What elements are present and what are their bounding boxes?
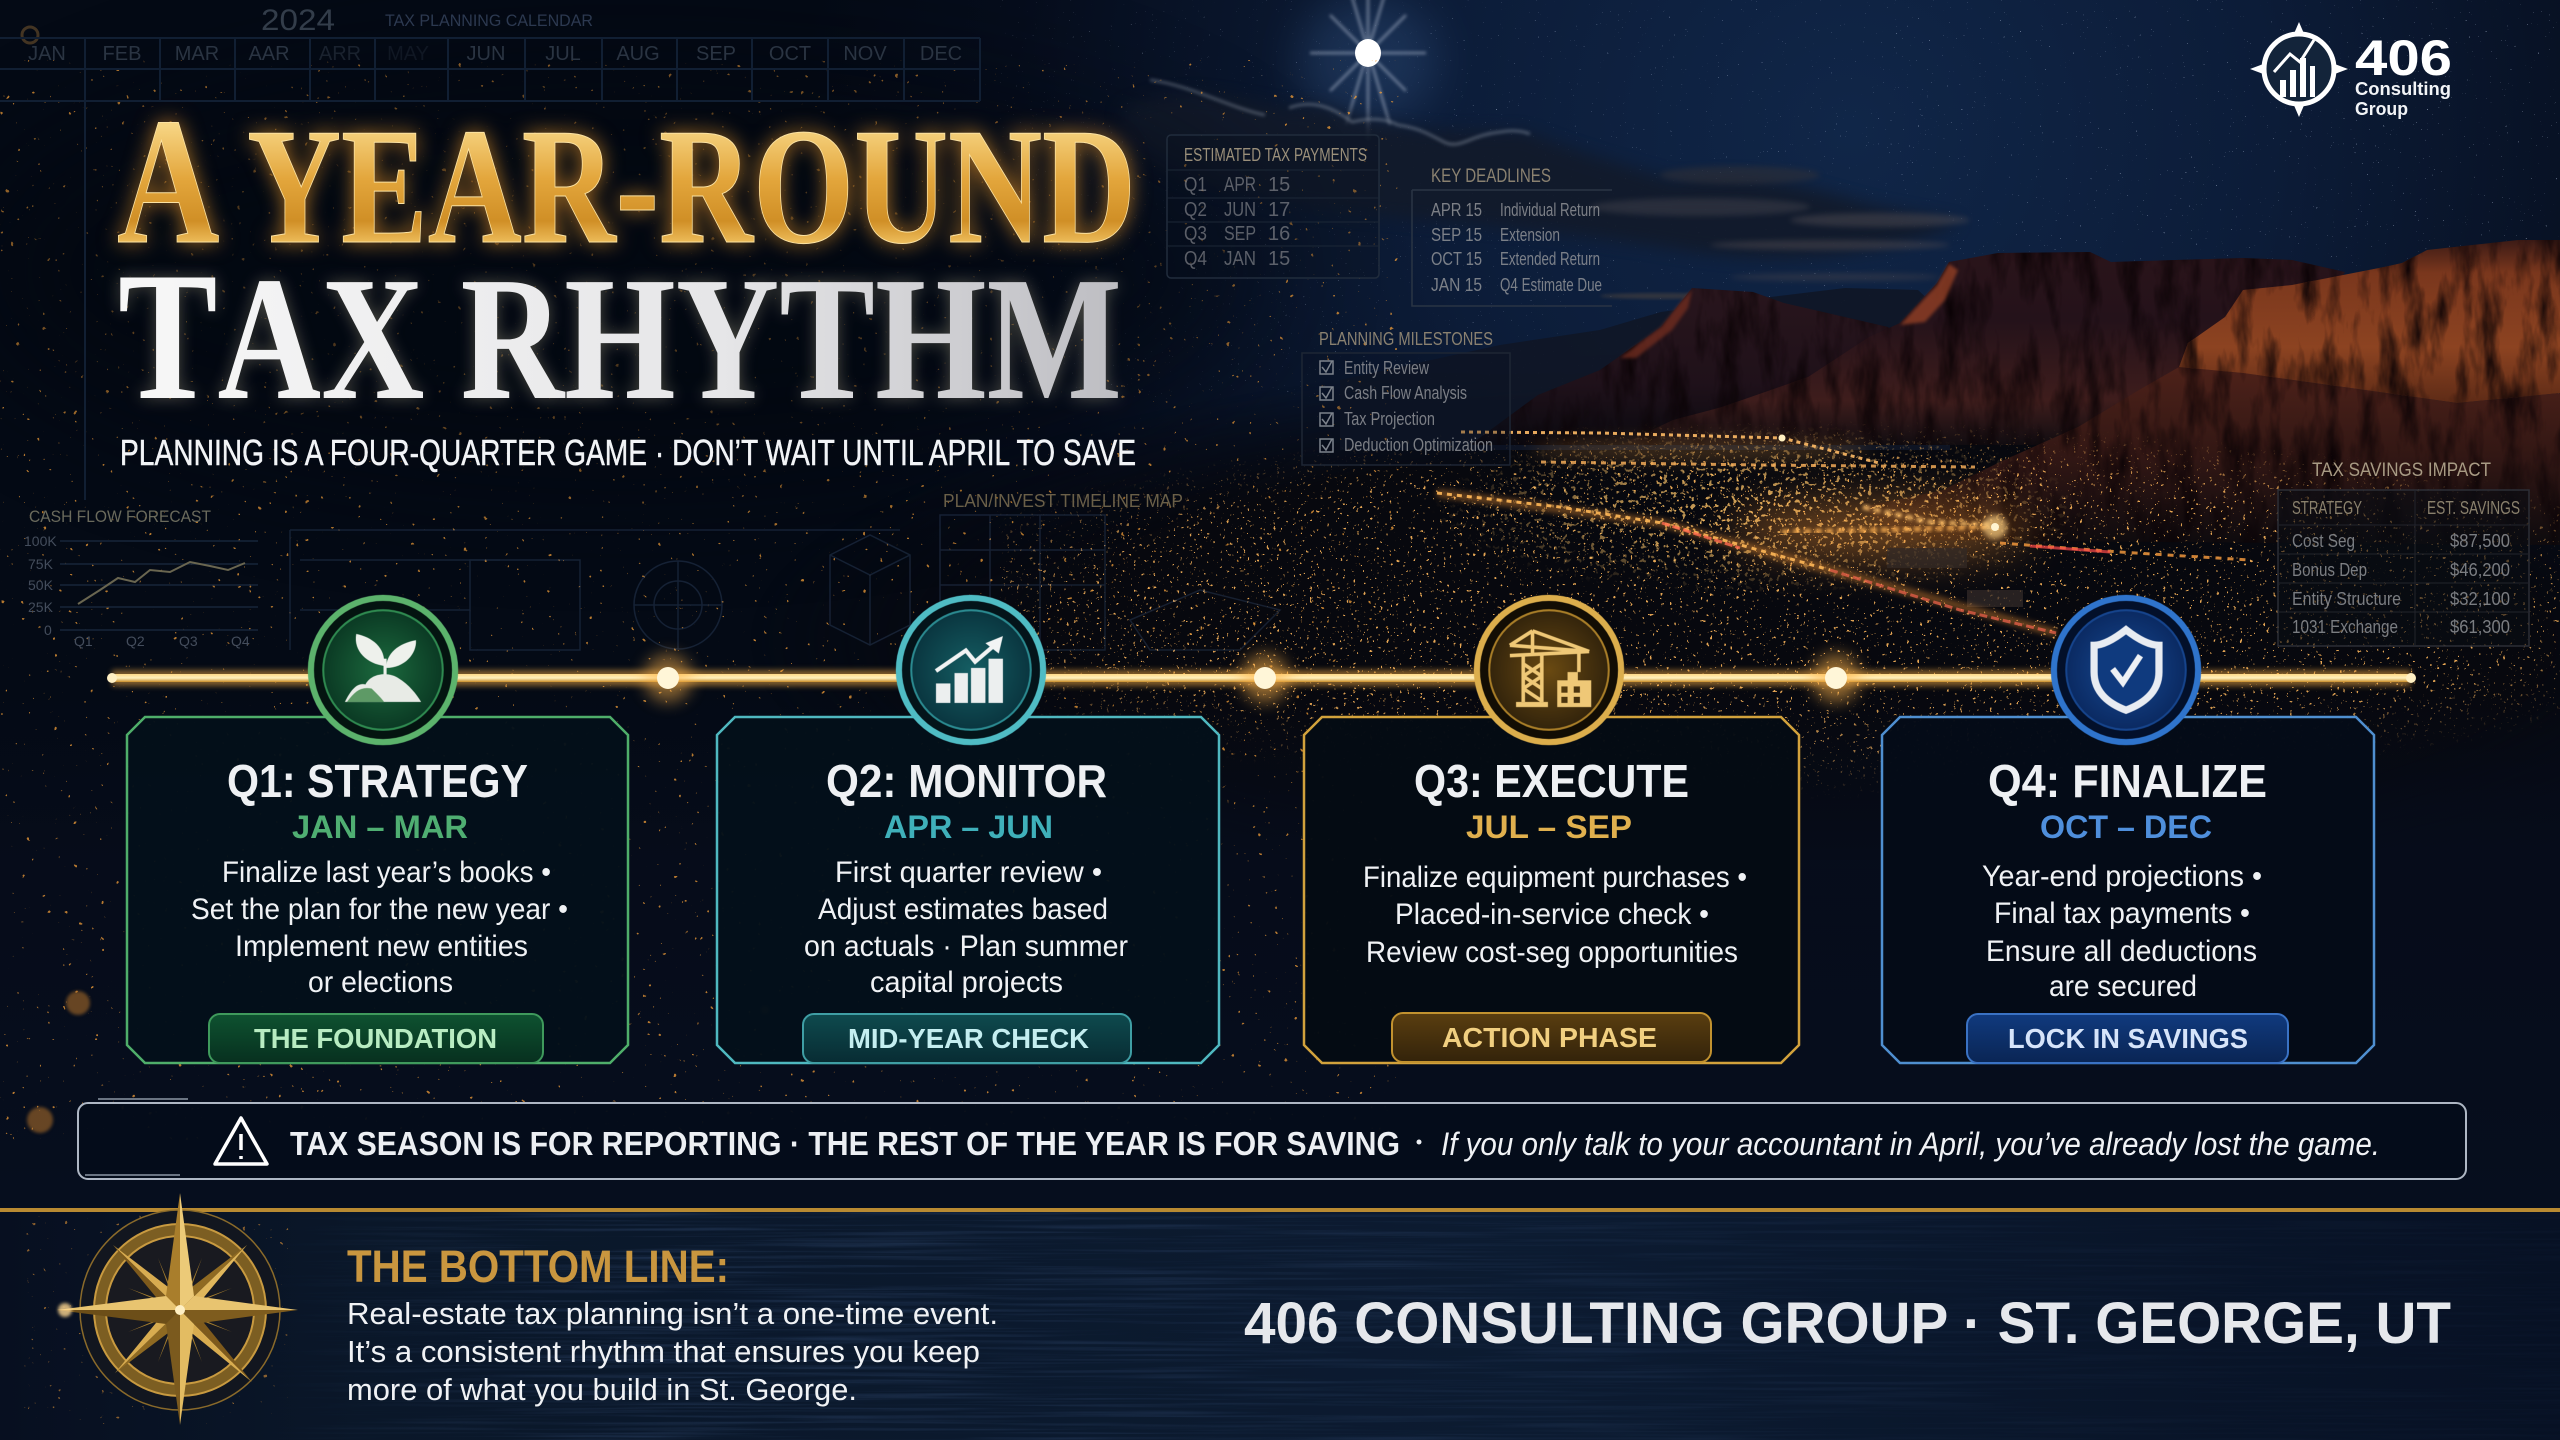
bottom line body: It’s a consistent rhythm that ensures you keep <box>347 1334 980 1369</box>
date range: OCT – DEC <box>2040 809 2212 845</box>
bottom line heading: THE BOTTOM LINE: <box>347 1241 729 1292</box>
company sign-off: 406 CONSULTING GROUP · ST. GEORGE, UT <box>1244 1291 2451 1356</box>
tag pill: MID-YEAR CHECK <box>848 1023 1089 1054</box>
ghost panel: tax savings impact: $32,100 <box>2450 589 2510 609</box>
ghost panel: tax planning calendar: AUG <box>616 43 660 65</box>
body text: are secured <box>2049 970 2197 1003</box>
ghost panel: tax planning calendar: OCT <box>769 43 811 65</box>
title line one: A YEAR-ROUND <box>117 82 1136 282</box>
icon: Q4 shield medallion <box>2054 598 2198 742</box>
bottom line body <box>347 1296 998 1407</box>
date range: JUL – SEP <box>1466 809 1632 845</box>
tag pill: THE FOUNDATION <box>254 1023 497 1054</box>
ghost panel: planning milestones: Entity Review <box>1344 358 1430 378</box>
bottom line body: Real-estate tax planning isn’t a one-time event. <box>347 1296 998 1331</box>
middle mesa lit edge <box>1900 264 1958 325</box>
logo wordmark: 406 <box>2355 30 2452 86</box>
ghost panel: estimated tax payments: JAN <box>1224 248 1256 270</box>
ghost panel: planning milestones: Tax Projection <box>1344 409 1435 429</box>
logo: Group <box>2355 99 2408 119</box>
ghost panel: key deadlines: Q4 Estimate Due <box>1500 275 1602 295</box>
card frame <box>127 717 628 1063</box>
left butte <box>1470 288 1930 445</box>
timeline <box>107 654 2416 702</box>
icon: Q1 seedling medallion <box>311 598 455 742</box>
ghost panel: tax savings impact: 1031 Exchange <box>2292 617 2398 637</box>
ghost panel: tax savings impact: Cost Seg <box>2292 531 2355 551</box>
ghost: garbled planning label: PLAN/INVEST TIMELINE MAP <box>943 491 1183 511</box>
ghost panel: cash flow forecast chart: CASH FLOW FORECAST <box>29 507 211 526</box>
ghost panel: tax savings impact: Entity Structure <box>2292 589 2401 609</box>
ghost panel: estimated tax payments: JUN <box>1224 199 1256 221</box>
ghost panel: tax savings impact: EST. SAVINGS <box>2427 498 2520 518</box>
background: stars <box>1000 0 2560 400</box>
distant ridge <box>1340 288 1950 450</box>
ghost panel: cash flow forecast chart: 0 <box>44 622 52 638</box>
ghost panel: estimated tax payments: Q1 <box>1184 174 1207 196</box>
city lights <box>1000 420 2560 820</box>
ghost: blueprint line art <box>290 515 1280 650</box>
background: gold specks <box>0 60 1400 1140</box>
callout banner <box>78 1099 2466 1179</box>
body text: Ensure all deductions <box>1986 935 2257 968</box>
tag pill <box>803 1014 1131 1063</box>
ghost panel: estimated tax payments: SEP <box>1224 223 1256 245</box>
ghost panel: tax planning calendar: JAN <box>28 43 66 65</box>
ghost panel: tax savings impact: $87,500 <box>2450 531 2510 551</box>
ghost panel: key deadlines: KEY DEADLINES <box>1431 166 1551 187</box>
title <box>117 82 1136 438</box>
card frame <box>1882 717 2374 1063</box>
body text: Adjust estimates based <box>818 893 1108 926</box>
ghost panel: estimated tax payments: ESTIMATED TAX PAYMENTS <box>1184 145 1367 165</box>
ghost panel: tax planning calendar: SEP <box>696 43 736 65</box>
icon: Q3 crane medallion <box>1477 598 1621 742</box>
ghost panel: estimated tax payments: 15 <box>1268 248 1290 270</box>
card frame <box>717 717 1219 1063</box>
ghost panel: estimated tax payments: 15 <box>1268 174 1290 196</box>
ghost panel: planning milestones: Cash Flow Analysis <box>1344 383 1467 403</box>
ghost panel: cash flow forecast chart: 25K <box>28 599 54 615</box>
card frame <box>1304 717 1799 1063</box>
panel: Q2 monitor <box>717 717 1219 1063</box>
dark wash behind title <box>0 60 1260 480</box>
ghost panel: key deadlines: Extension <box>1500 225 1560 245</box>
body text: on actuals · Plan summer <box>804 930 1128 963</box>
ghost panel: tax planning calendar: ARR <box>319 43 361 65</box>
ghost panel: tax planning calendar: 2024 <box>261 4 335 37</box>
ghost panel: planning milestones: Deduction Optimization <box>1344 435 1493 455</box>
title line two: TAX RHYTHM <box>118 234 1122 438</box>
ghost panel: cash flow forecast chart: Q1 <box>74 633 93 649</box>
ghost panel: tax savings impact: STRATEGY <box>2292 498 2362 518</box>
panel: Q1 strategy <box>127 717 628 1063</box>
ghost panel: estimated tax payments: Q3 <box>1184 223 1207 245</box>
icon: warning triangle <box>215 1118 267 1164</box>
body text: Implement new entities <box>235 930 528 963</box>
logo emblem <box>2250 22 2348 117</box>
left butte lit edge <box>1620 290 1692 358</box>
ghost panel: key deadlines: Extended Return <box>1500 249 1600 269</box>
body text <box>1982 860 2262 1003</box>
mountains <box>1340 240 2560 545</box>
clouds <box>1120 80 1970 299</box>
bottom line body: more of what you build in St. George. <box>347 1372 857 1407</box>
ghost panel: estimated tax payments: 16 <box>1268 223 1290 245</box>
body text <box>1363 861 1747 969</box>
subtitle: PLANNING IS A FOUR-QUARTER GAME · DON’T WAIT UNTIL APRIL TO SAVE <box>120 432 1136 473</box>
panel: Q4 finalize <box>1882 717 2374 1063</box>
ghost panel: tax planning calendar: JUL <box>545 43 581 65</box>
tag pill <box>209 1014 543 1063</box>
icon: gold compass <box>20 1193 298 1425</box>
logo: Consulting <box>2355 79 2451 99</box>
body text: Finalize last year’s books • <box>222 856 551 889</box>
background: dark lower band <box>0 690 2560 1220</box>
ghost panel: tax savings impact <box>2278 460 2529 646</box>
ghost panel: key deadlines: OCT 15 <box>1431 249 1482 269</box>
body text <box>804 856 1128 999</box>
ghost panel: tax planning calendar: DEC <box>920 43 962 65</box>
icon: Q2 growth chart medallion <box>899 598 1043 742</box>
ghost panel: estimated tax payments: 17 <box>1268 199 1290 221</box>
callout separator <box>1416 1140 1422 1144</box>
ghost panel: cash flow forecast chart: 75K <box>28 556 54 572</box>
ghost panel: tax savings impact: Bonus Dep <box>2292 560 2367 580</box>
ghost panel: cash flow forecast chart: Q4 <box>231 633 250 649</box>
city glow and roads <box>1437 432 2249 633</box>
right mesa cliff <box>2179 240 2560 403</box>
tag pill <box>1392 1013 1711 1062</box>
downtown blocks <box>1887 548 1967 568</box>
heading: Q1: STRATEGY <box>227 755 528 807</box>
date range: APR – JUN <box>884 809 1053 845</box>
ghost panel: cash flow forecast chart: Q3 <box>179 633 198 649</box>
body text: capital projects <box>870 966 1063 999</box>
callout statement: TAX SEASON IS FOR REPORTING · THE REST OF THE YEAR IS FOR SAVING <box>290 1125 1400 1162</box>
ghost panel: planning milestones: PLANNING MILESTONES <box>1319 329 1493 349</box>
ghost panel: key deadlines: SEP 15 <box>1431 225 1482 245</box>
diagonal points <box>113 1245 252 1382</box>
ghost panel: tax planning calendar: TAX PLANNING CALENDAR <box>385 11 593 30</box>
ghost panel: key deadlines: JAN 15 <box>1431 275 1482 295</box>
body text: Year-end projections • <box>1982 860 2262 893</box>
body text: Finalize equipment purchases • <box>1363 861 1747 894</box>
ghost panel: tax savings impact: TAX SAVINGS IMPACT <box>2312 460 2491 481</box>
body text: Placed-in-service check • <box>1395 898 1709 931</box>
ghost panel: estimated tax payments <box>1167 135 1379 278</box>
logo <box>2250 22 2452 119</box>
bokeh lights <box>22 27 769 1133</box>
cardinal points <box>57 1193 298 1425</box>
ghost panel: cash flow forecast chart: 100K <box>24 533 57 549</box>
ghost panel: tax planning calendar <box>0 4 980 500</box>
ghost panel: estimated tax payments: APR <box>1224 174 1256 196</box>
date range: JAN – MAR <box>292 809 468 845</box>
heading: Q4: FINALIZE <box>1988 755 2267 807</box>
heading: Q3: EXECUTE <box>1414 755 1689 807</box>
body text <box>191 856 568 999</box>
ghost panel: key deadlines: Individual Return <box>1500 200 1600 220</box>
body text: or elections <box>308 966 453 999</box>
right mesa slope <box>1863 367 2560 545</box>
heading: Q2: MONITOR <box>826 755 1107 807</box>
body text: Review cost-seg opportunities <box>1366 936 1738 969</box>
body text: First quarter review • <box>835 856 1102 889</box>
middle mesa <box>1620 252 2345 445</box>
ghost panel: tax planning calendar: AAR <box>248 43 290 65</box>
body text: Set the plan for the new year • <box>191 893 568 926</box>
ghost panel: estimated tax payments: Q4 <box>1184 248 1207 270</box>
dense downtown lights <box>1440 428 2080 592</box>
ghost panel: cash flow forecast chart: Q2 <box>126 633 145 649</box>
ghost panel: tax planning calendar: MAY <box>387 43 429 65</box>
ghost panel: tax planning calendar: NOV <box>843 43 887 65</box>
secondary spikes <box>128 1258 232 1362</box>
ghost panel: tax planning calendar: FEB <box>103 43 141 65</box>
callout italic note: If you only talk to your accountant in April, you’ve already lost the game. <box>1441 1126 2380 1162</box>
ghost panel: key deadlines: APR 15 <box>1431 200 1482 220</box>
ghost panel: key deadlines <box>1412 166 1612 306</box>
ghost panel: planning milestones <box>1302 329 1510 465</box>
tag pill: ACTION PHASE <box>1442 1022 1657 1053</box>
panel: Q3 execute <box>1304 717 1799 1063</box>
ghost panel: tax savings impact: $46,200 <box>2450 560 2510 580</box>
ghost panel: estimated tax payments: Q2 <box>1184 199 1207 221</box>
ghost panel: tax planning calendar: JUN <box>467 43 505 65</box>
ghost panel: tax planning calendar: MAR <box>175 43 219 65</box>
moon with rays <box>1298 0 1438 140</box>
ghost panel: cash flow forecast chart: 50K <box>28 577 54 593</box>
tag pill <box>1967 1014 2288 1063</box>
city ground <box>1004 413 2560 812</box>
tag pill: LOCK IN SAVINGS <box>2008 1023 2248 1054</box>
ghost panel: tax savings impact: $61,300 <box>2450 617 2510 637</box>
body text: Final tax payments • <box>1994 897 2250 930</box>
footer band <box>0 1208 2560 1440</box>
ghost panel: cash flow forecast chart <box>24 507 258 649</box>
